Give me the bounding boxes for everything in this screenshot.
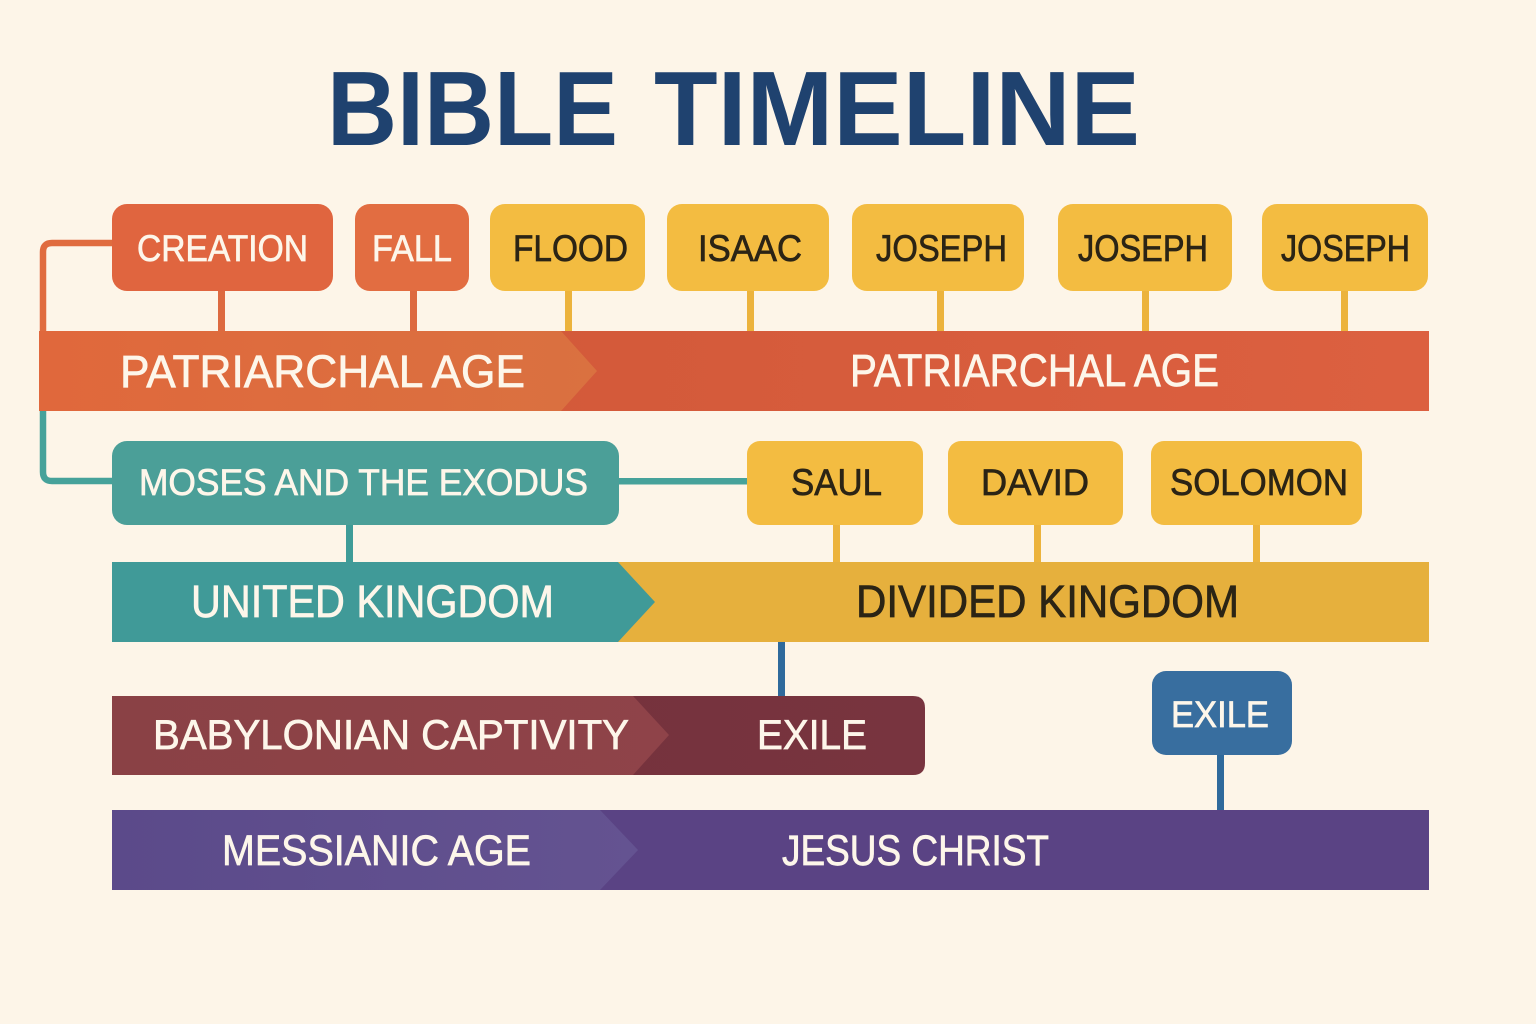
connector: Moses to Saul xyxy=(618,478,748,484)
band: Babylonian Captivity and Exile: BABYLONIAN CAPTIVITY xyxy=(153,711,629,758)
title: TIMELINE xyxy=(654,50,1140,168)
stems: row two xyxy=(346,524,1260,562)
band: Messianic Age and Jesus Christ xyxy=(112,810,1429,890)
band: Patriarchal Age: PATRIARCHAL AGE xyxy=(120,346,525,397)
label: Isaac xyxy=(667,204,829,291)
label: Creation xyxy=(112,204,333,291)
band: Patriarchal Age: PATRIARCHAL AGE xyxy=(850,345,1219,396)
label: Moses and the Exodus: MOSES AND THE EXODUS xyxy=(139,462,588,503)
connector: creation to patriarchal age and Moses xyxy=(43,243,112,481)
label: Solomon: SOLOMON xyxy=(1170,462,1348,503)
label: Saul: SAUL xyxy=(791,462,882,503)
stem: exile to Jesus Christ band xyxy=(1217,754,1224,810)
label: David xyxy=(948,441,1123,525)
label: Joseph 1 xyxy=(852,204,1024,291)
label: Exile xyxy=(1152,671,1292,755)
label: Moses and the Exodus xyxy=(112,441,619,525)
stem: divided kingdom to exile band xyxy=(778,642,785,696)
band: Messianic Age and Jesus Christ: JESUS CHRIST xyxy=(782,827,1049,875)
label: Flood: FLOOD xyxy=(513,228,628,269)
label: Fall xyxy=(355,204,469,291)
band: Babylonian Captivity and Exile xyxy=(112,696,925,775)
label: Solomon xyxy=(1151,441,1362,525)
label: Creation: CREATION xyxy=(137,228,308,269)
title xyxy=(327,50,1140,168)
label: Isaac: ISAAC xyxy=(698,228,802,269)
band: Messianic Age and Jesus Christ: MESSIANIC AGE xyxy=(222,827,531,875)
label: Saul xyxy=(747,441,923,525)
title: BIBLE xyxy=(327,50,618,168)
label: Exile: EXILE xyxy=(1171,694,1269,735)
band: United and Divided Kingdom xyxy=(112,562,1429,642)
label: Joseph 3 xyxy=(1262,204,1428,291)
label: Joseph 2: JOSEPH xyxy=(1078,228,1208,269)
label: David: DAVID xyxy=(981,462,1089,503)
stems: row one xyxy=(218,290,1348,332)
band: United and Divided Kingdom: DIVIDED KINGDOM xyxy=(856,576,1239,627)
band: Patriarchal Age xyxy=(39,331,1429,411)
label: Joseph 2 xyxy=(1058,204,1232,291)
label: Flood xyxy=(490,204,645,291)
label: Joseph 1: JOSEPH xyxy=(876,228,1007,269)
band: Babylonian Captivity and Exile: EXILE xyxy=(757,711,867,758)
label: Fall: FALL xyxy=(372,228,452,269)
label: Joseph 3: JOSEPH xyxy=(1281,228,1410,269)
band: United and Divided Kingdom: UNITED KINGDOM xyxy=(191,576,554,627)
